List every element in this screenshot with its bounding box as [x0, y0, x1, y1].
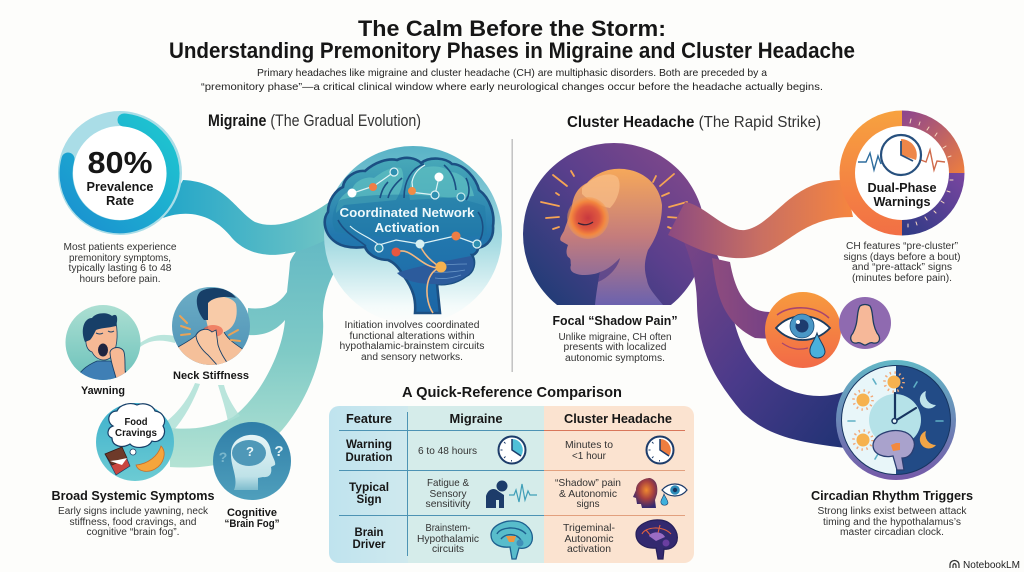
title: The Calm Before the Storm: — [358, 16, 666, 41]
text: circadian description: timing and the hypothalamus’s — [823, 517, 961, 528]
text: systemic description — [58, 506, 209, 538]
label: cognitive brain fog: Cognitive — [227, 507, 277, 519]
heading: focal shadow pain: Focal “Shadow Pain” — [552, 313, 678, 328]
row: brain driver: Hypothalamic — [417, 533, 479, 545]
icon: cluster brain — [636, 520, 677, 559]
icon: nose — [839, 297, 891, 349]
label: coordinated network activation: Activation — [374, 220, 440, 235]
heading: broad systemic symptoms: Broad Systemic Symptoms — [52, 488, 214, 503]
text: network description: and sensory networks. — [361, 352, 463, 363]
icon: brain fog: ? — [219, 449, 227, 465]
label: food cravings — [115, 417, 157, 439]
row: warning duration — [346, 436, 674, 464]
text: shadow pain description: autonomic symptoms. — [565, 353, 665, 364]
table header: Feature — [346, 412, 392, 426]
label: food cravings: Food — [124, 417, 148, 428]
stat label: Prevalence — [86, 180, 154, 194]
text: prevalence description: premonitory symptoms, — [69, 253, 171, 264]
stat label: Rate — [106, 194, 134, 208]
text: shadow pain description: presents with localized — [564, 342, 666, 353]
panel: comparison table — [329, 406, 694, 563]
icon: circadian clock — [836, 360, 956, 480]
stat label — [86, 180, 154, 208]
label: cognitive brain fog: “Brain Fog” — [224, 518, 280, 530]
row: brain driver: activation — [567, 543, 611, 555]
icon: neck stiffness person — [170, 287, 250, 370]
text: systemic description: stiffness, food cravings, and — [70, 517, 196, 528]
row: brain driver: Driver — [352, 537, 386, 551]
row: warning duration: Warning — [346, 437, 392, 451]
flow: cluster ribbons — [668, 180, 853, 448]
icon: yawning person — [66, 305, 140, 382]
label: dual-phase warnings: Warnings — [874, 194, 930, 209]
label: yawning: Yawning — [81, 385, 125, 397]
illustration: shadow pain head — [523, 143, 702, 305]
icon: food cravings — [96, 403, 174, 481]
icon: eye with tear — [765, 292, 841, 368]
icon: migraine clock — [498, 436, 526, 464]
table header — [346, 412, 672, 426]
panel: dual-phase warnings ring — [840, 110, 965, 236]
row: typical sign: Fatigue & — [427, 477, 469, 489]
icon: cluster clock — [646, 436, 674, 464]
row: warning duration: Duration — [346, 450, 392, 464]
stat value: 80% — [88, 145, 152, 180]
icon: brain fog: ? — [274, 443, 284, 460]
label: neck stiffness: Neck Stiffness — [173, 370, 249, 382]
heading: cluster headache: Cluster Headache (The Rapid Strike) — [567, 114, 821, 131]
row: brain driver: Brain — [354, 525, 384, 539]
text: network description — [340, 320, 484, 363]
text: network description: functional alterations within — [350, 331, 474, 342]
text: prevalence description: Most patients experience — [64, 242, 177, 253]
row: brain driver: Brainstem- — [426, 522, 471, 534]
row: typical sign: Sensory — [430, 488, 467, 500]
row: brain driver: circuits — [432, 543, 464, 555]
intro text: “premonitory phase”—a critical clinical window where early neurological changes occur before the headache actually begins. — [201, 81, 823, 93]
text: prevalence description: hours before pain. — [80, 274, 160, 285]
row: typical sign: signs — [576, 498, 600, 510]
text: dual-phase description: CH features “pre-cluster” — [846, 241, 958, 252]
heading: migraine: Migraine (The Gradual Evolution) — [208, 112, 421, 130]
row: typical sign: Sign — [356, 492, 382, 506]
text: prevalence description — [64, 242, 177, 285]
icon: head with pain spot — [633, 478, 657, 508]
label: dual-phase warnings: Dual-Phase — [868, 180, 936, 195]
icon: fatigued person with wave — [486, 480, 537, 508]
icon: clock with pulse — [858, 135, 945, 175]
row: typical sign: & Autonomic — [559, 488, 617, 500]
title — [169, 16, 855, 63]
icon: brain fog: ? — [246, 444, 254, 459]
text: systemic description: Early signs include yawning, neck — [58, 506, 209, 517]
text: network description: hypothalamic-brainstem circuits — [340, 341, 484, 352]
row: typical sign: “Shadow” pain — [555, 477, 621, 489]
text: dual-phase description: (minutes before pain). — [852, 273, 952, 284]
panel: prevalence ring — [58, 111, 182, 235]
text: circadian description: master circadian clock. — [840, 527, 944, 538]
text: network description: Initiation involves coordinated — [344, 320, 480, 331]
label: food cravings: Cravings — [115, 428, 157, 439]
row: warning duration: <1 hour — [572, 450, 606, 462]
illustration: coordinated network brain — [324, 146, 502, 324]
title: Understanding Premonitory Phases in Migraine and Cluster Headache — [169, 38, 855, 63]
heading: comparison: A Quick-Reference Comparison — [402, 384, 622, 401]
table header: Cluster Headache — [564, 412, 672, 426]
text: circadian description: Strong links exist between attack — [818, 506, 968, 517]
row: brain driver: Trigeminal- — [563, 522, 615, 534]
label: coordinated network activation — [340, 205, 475, 235]
text: circadian description — [818, 506, 968, 538]
icon: migraine brain — [491, 521, 532, 559]
row: typical sign: sensitivity — [426, 498, 471, 510]
flow: migraine ribbons — [140, 180, 350, 467]
icon: brain fog — [213, 422, 291, 500]
label: cognitive brain fog — [224, 507, 280, 530]
text: shadow pain description: Unlike migraine, CH often — [558, 332, 672, 343]
intro text — [201, 67, 823, 93]
text: dual-phase description — [844, 241, 960, 284]
logo: NotebookLM: NotebookLM — [963, 559, 1020, 571]
label: coordinated network activation: Coordinated Network — [340, 205, 475, 220]
text: systemic description: cognitive “brain fog”. — [86, 527, 180, 538]
row: typical sign — [349, 477, 687, 510]
text: dual-phase description: and “pre-attack” signs — [852, 262, 952, 273]
row: warning duration: Minutes to — [565, 439, 613, 451]
text: prevalence description: typically lasting 6 to 48 — [68, 263, 172, 274]
row: typical sign: Typical — [349, 480, 389, 494]
row: brain driver: Autonomic — [564, 533, 614, 545]
heading: circadian rhythm triggers: Circadian Rhythm Triggers — [811, 488, 973, 503]
icon: tearful eye — [661, 484, 687, 505]
row: brain driver — [352, 520, 677, 559]
text: dual-phase description: signs (days before a bout) — [844, 252, 960, 263]
table header: Migraine — [450, 412, 503, 426]
row: warning duration: 6 to 48 hours — [418, 445, 477, 457]
intro text: Primary headaches like migraine and cluster headache (CH) are multiphasic disorders. Both are preceded by a — [257, 67, 767, 79]
label: dual-phase warnings — [868, 180, 936, 209]
text: shadow pain description — [558, 332, 672, 364]
